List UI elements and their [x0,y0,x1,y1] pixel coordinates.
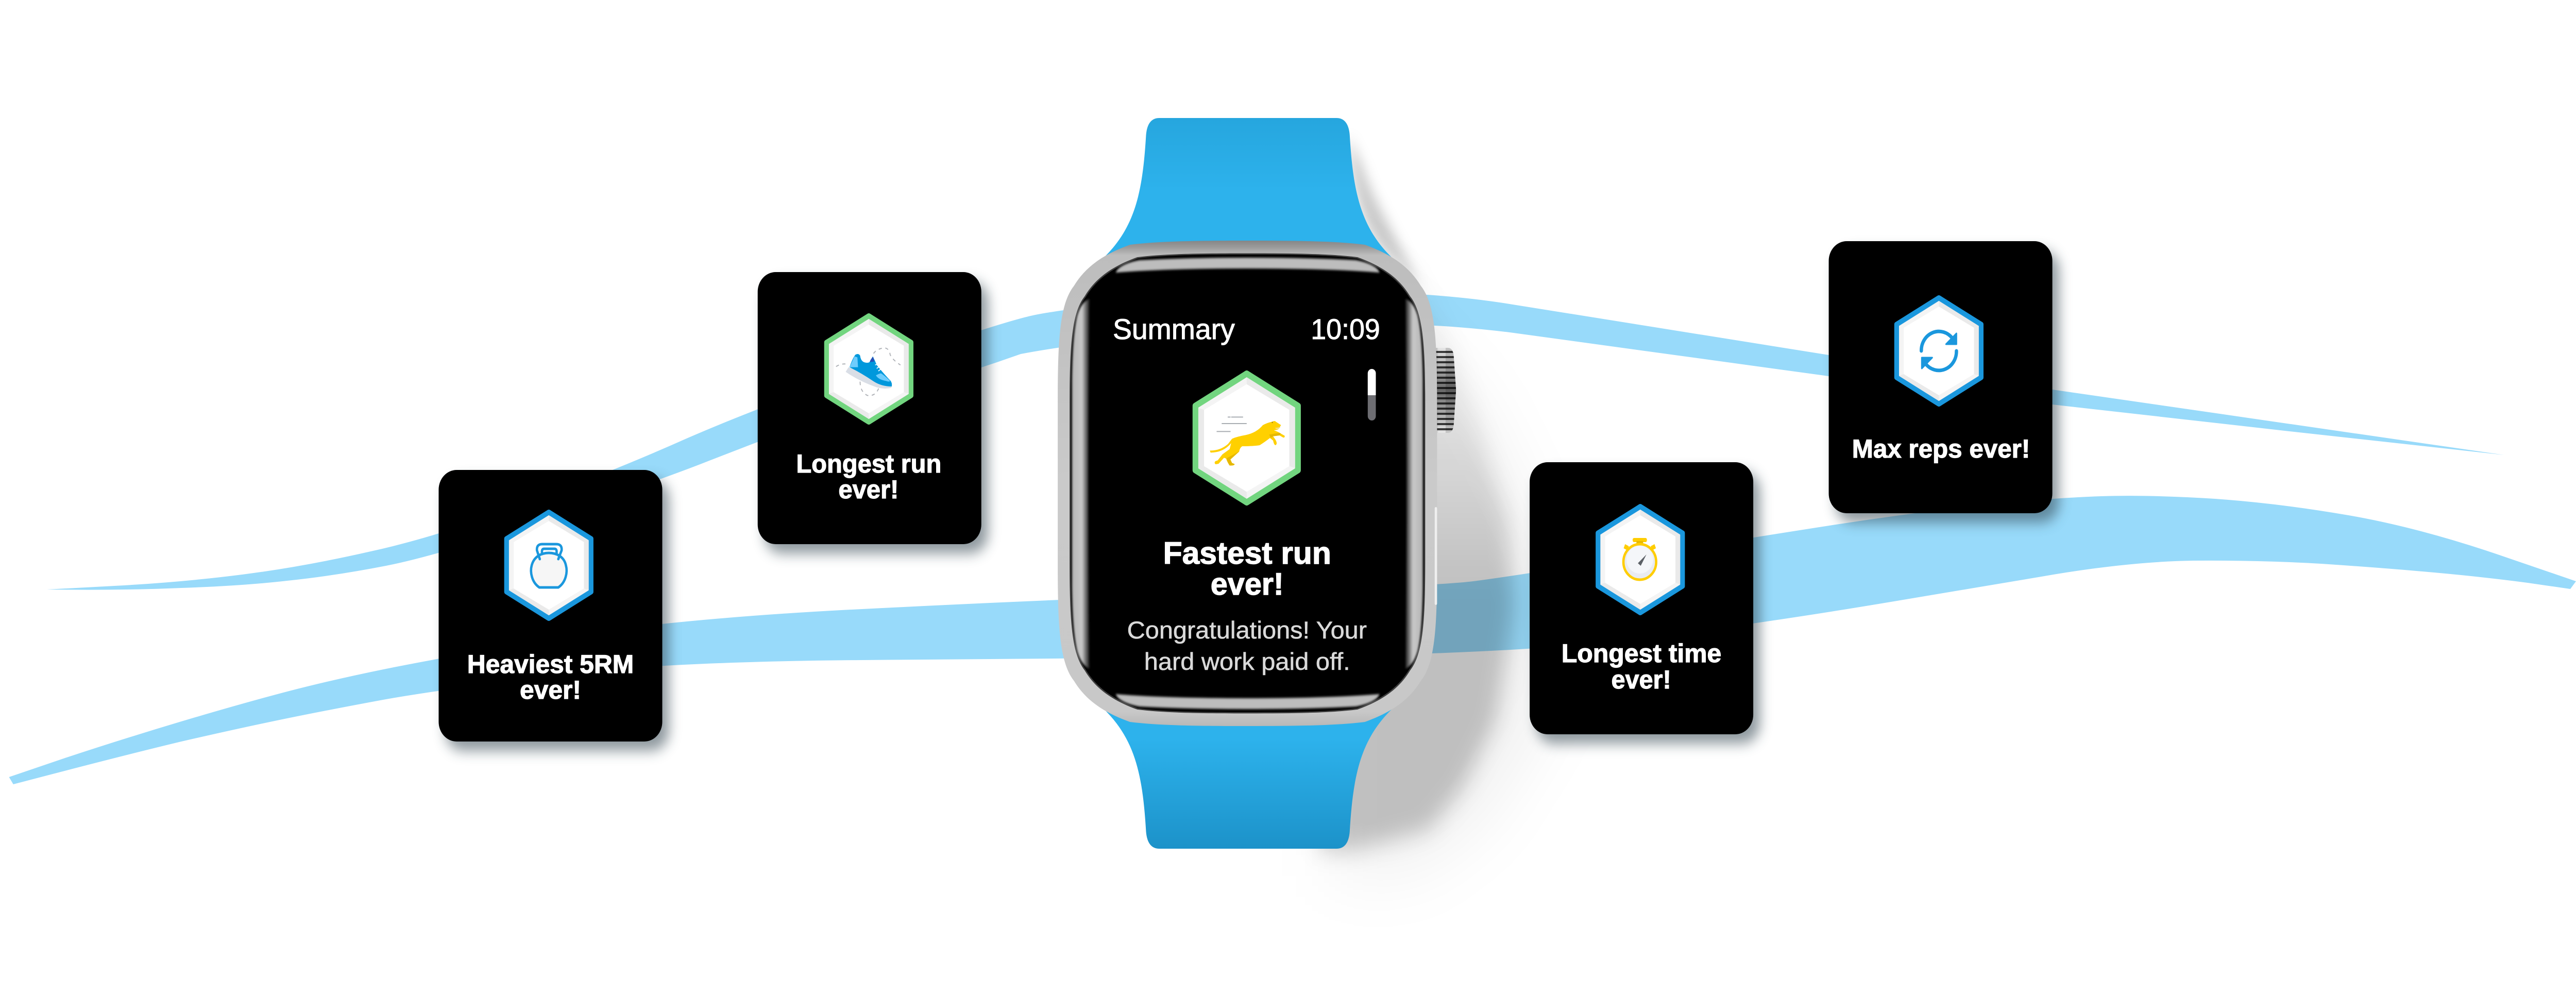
screen title [1163,536,1331,602]
watch case [1058,241,1437,726]
icon: kettlebell badge [506,512,591,618]
scroll indicator [1368,369,1376,420]
card label: ever! [1612,665,1671,694]
screen time: 10:09 [1311,313,1380,345]
card label: ever! [520,676,581,704]
screen title: Fastest run [1163,536,1331,571]
card: heaviest 5RM [438,470,669,751]
screen title: ever! [1211,567,1284,602]
screen message: hard work paid off. [1144,648,1350,675]
card label: Max reps ever! [1852,434,2030,463]
apple watch [1058,118,1458,849]
upper ribbon [47,291,2504,590]
icon: stopwatch badge [1598,507,1683,613]
screen message [1127,616,1367,675]
screen message: Congratulations! Your [1127,616,1367,644]
icon: cheetah badge [1195,374,1298,502]
card: max reps [1829,241,2059,523]
screen reflections [1072,258,1423,709]
card label [796,449,941,504]
lower ribbon [9,496,2576,784]
screen heading: Summary: Summary [1113,313,1235,345]
card label: Longest time [1562,639,1721,668]
icon: repeat badge [1896,298,1981,404]
digital crown [1436,348,1456,433]
card label [1562,639,1721,694]
icon: shoe badge [826,316,911,422]
card: longest time [1530,462,1760,744]
card label [467,650,634,704]
card label: Longest run [796,449,941,478]
watch drop shadow [1320,135,1562,876]
watch band [1104,118,1392,849]
card label: Heaviest 5RM [467,650,634,679]
card: longest run [758,272,988,553]
card label: ever! [838,475,899,504]
